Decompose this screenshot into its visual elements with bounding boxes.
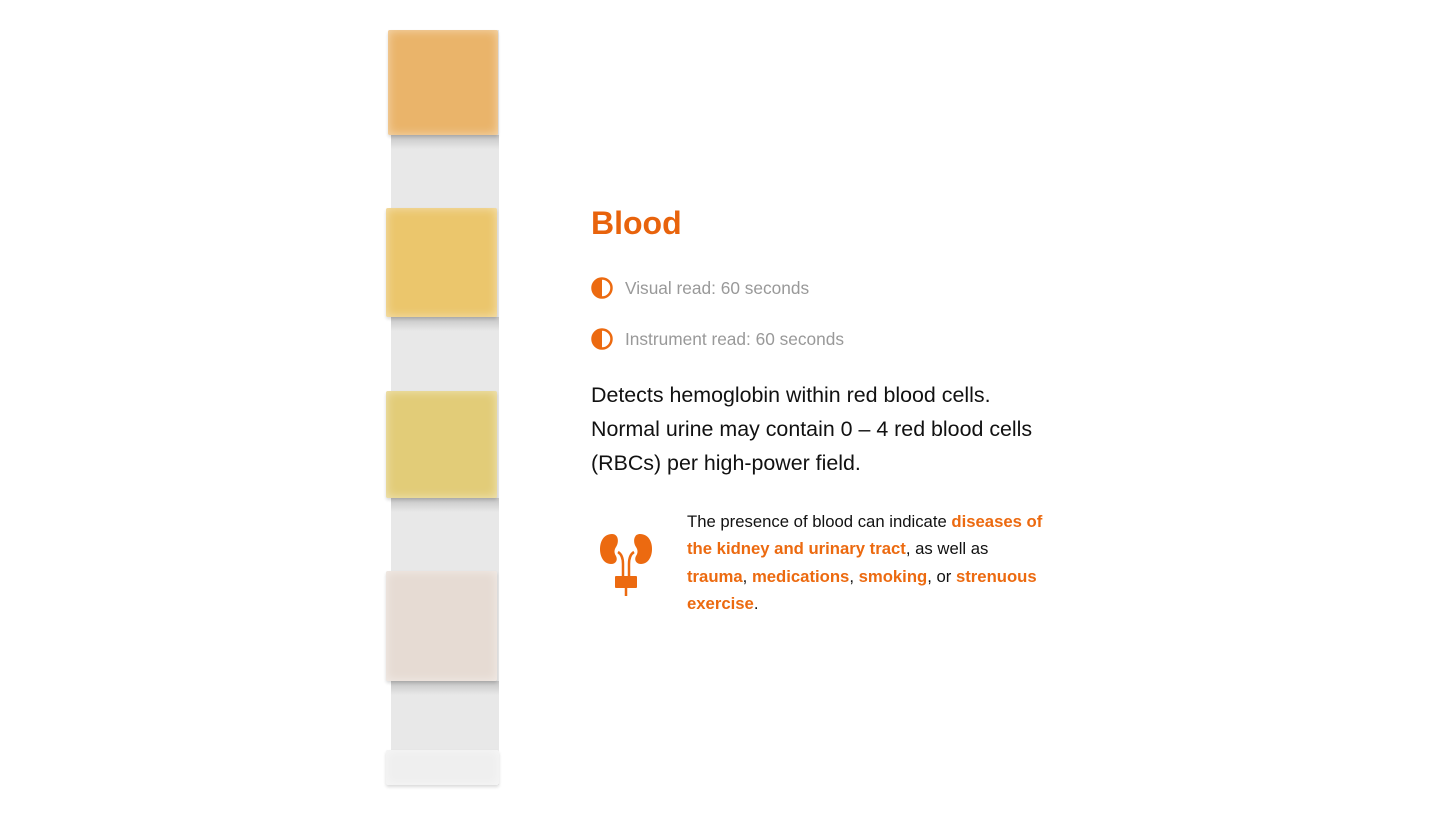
callout text [687,512,1042,613]
instrument read row: Instrument read: 60 seconds [625,329,844,349]
pad: yellow [386,208,497,317]
icon: half circle [591,277,613,299]
description: Detects hemoglobin within red blood cells. [591,383,991,407]
callout text: The presence of blood can indicate diseases of [687,512,1042,531]
icon: kidneys [600,534,652,596]
callout text: trauma, medications, smoking, or strenuous [687,567,1037,586]
callout text: exercise. [687,594,758,613]
callout text: the kidney and urinary tract, as well as [687,539,988,558]
visual read row: Visual read: 60 seconds [625,278,809,298]
title: Blood [591,205,682,241]
description [591,383,1032,475]
description: Normal urine may contain 0 – 4 red blood cells [591,417,1032,441]
description: (RBCs) per high-power field. [591,451,861,475]
icon: half circle [591,328,613,350]
pad: white [386,750,499,785]
test strip [385,30,500,788]
pad: beige [386,571,497,681]
pad: yellow-green [386,391,497,498]
pad: orange [388,30,498,135]
